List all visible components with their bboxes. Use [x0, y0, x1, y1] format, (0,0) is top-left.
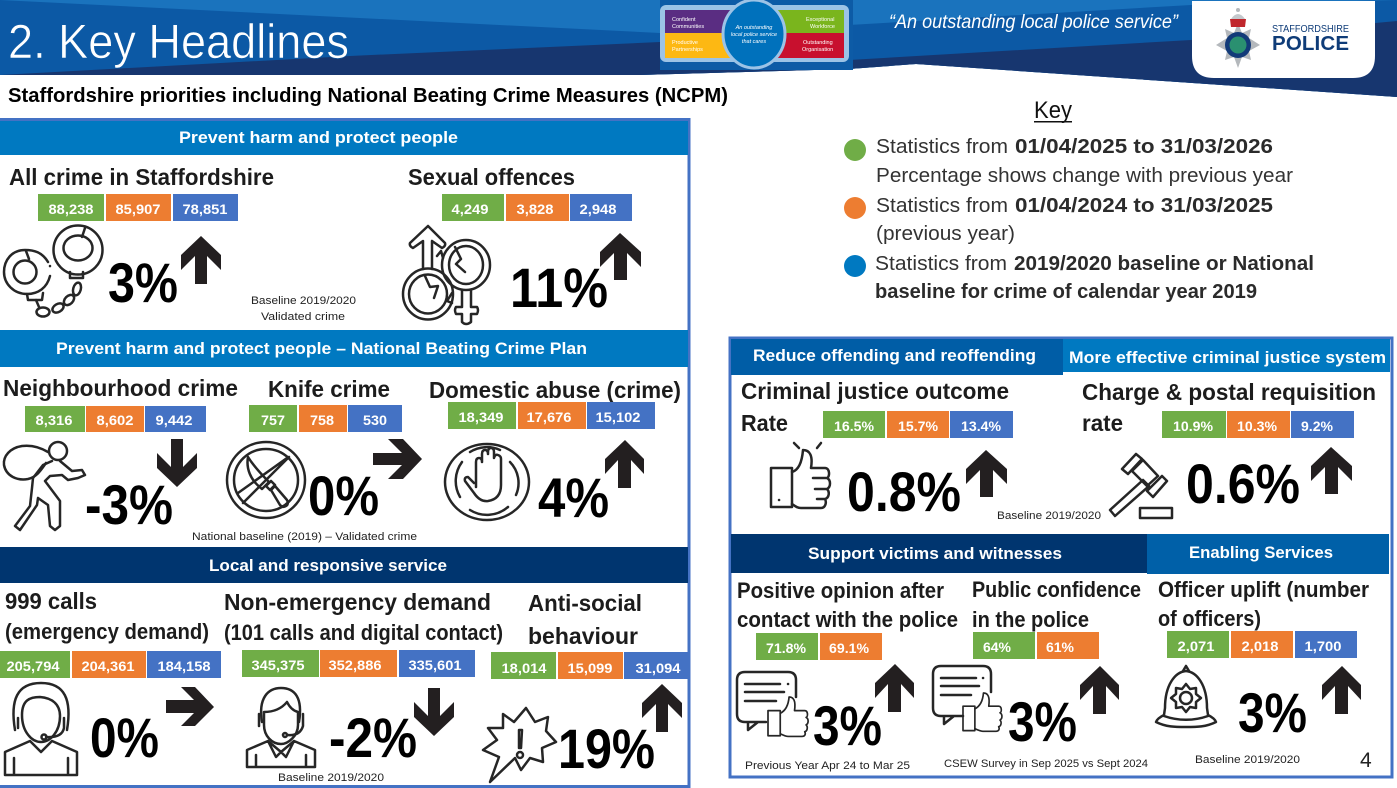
arrow right [373, 439, 422, 479]
key: orange: (previous year) [876, 223, 1015, 245]
metric: anti-social behaviour: 19% [558, 717, 655, 780]
key: blue [844, 253, 1314, 303]
metric: non-emergency demand: 345,375 [252, 657, 305, 673]
icon: feedback bubble with thumb [737, 672, 808, 736]
metric: sexual offences: 3,828 [516, 201, 554, 217]
metric: knife crime: 530 [363, 412, 387, 428]
section heading: support victims [731, 534, 1147, 573]
metric: criminal justice outcome rate: 0.8% [847, 460, 961, 523]
metric: criminal justice outcome rate: 15.7% [898, 418, 939, 434]
metric: 999 calls: 184,158 [158, 658, 211, 674]
arrow up [966, 450, 1007, 497]
icon: police helmet [1156, 666, 1216, 727]
panel: justice, victims and enabling [730, 338, 1392, 777]
header banner [0, 0, 1397, 97]
metric: domestic abuse: 4% [538, 466, 609, 529]
values logo: Workforce [810, 24, 835, 30]
title: 2. Key Headlines [8, 16, 349, 69]
police logo: STAFFORDSHIRE [1272, 23, 1349, 35]
metric: 999 calls: 0% [90, 706, 159, 769]
metric: non-emergency demand: (101 calls and digital contact) [224, 620, 503, 645]
metric: positive opinion: contact with the police [737, 607, 958, 632]
metric: domestic abuse: 17,676 [526, 409, 572, 425]
police logo [1192, 1, 1375, 78]
section heading: local and responsive service: Local and responsive service [209, 557, 447, 575]
metric: anti-social behaviour [483, 590, 689, 782]
metric: neighbourhood crime: Neighbourhood crime [3, 375, 238, 401]
page number: 4 [1360, 749, 1372, 772]
section heading: enabling services: Enabling Services [1189, 544, 1333, 562]
note: Baseline 2019/2020 [997, 510, 1101, 522]
metric: knife crime: 0% [308, 464, 379, 527]
metric: public confidence: 64% [983, 639, 1012, 655]
key: green: Statistics from [876, 136, 1008, 158]
icon: warning burst [483, 708, 556, 782]
icon: no knives [227, 442, 305, 518]
values logo: local police service [731, 32, 777, 38]
metric: positive opinion: Positive opinion after [737, 578, 944, 603]
values logo: An outstanding [735, 25, 773, 31]
arrow up [605, 440, 644, 488]
section heading: national beating crime plan [0, 330, 688, 367]
subtitle: Staffordshire priorities including National Beating Crime Measures (NCPM) [8, 85, 728, 107]
values logo [660, 0, 853, 70]
section heading: reduce offending [731, 339, 1063, 375]
metric: officer uplift: 2,071 [1178, 638, 1215, 654]
note: Baseline 2019/2020 [251, 295, 356, 307]
icon: male call handler [247, 688, 315, 767]
police logo: POLICE [1272, 32, 1349, 55]
metric: neighbourhood crime: 9,442 [156, 412, 193, 428]
arrow up [1311, 447, 1352, 494]
metric: public confidence: 61% [1046, 639, 1075, 655]
metric: sexual offences [403, 164, 641, 324]
key: orange: 01/04/2024 to 31/03/2025 [1015, 195, 1273, 217]
arrow up [1080, 666, 1119, 714]
icon: thief with sack [4, 442, 85, 530]
note: Baseline 2019/2020 [278, 772, 384, 784]
key: blue: 2019/2020 baseline or National [1014, 253, 1314, 275]
values logo: Confident [672, 17, 696, 23]
values logo: Organisation [802, 47, 833, 53]
metric: domestic abuse: Domestic abuse (crime) [429, 377, 681, 403]
metric: all crime: 85,907 [116, 201, 161, 217]
values logo: Productive [672, 40, 698, 46]
metric: charge and postal requisition rate: rate [1082, 410, 1123, 436]
metric: knife crime: 758 [310, 412, 334, 428]
arrow up [600, 233, 641, 280]
metric: 999 calls: 204,361 [82, 658, 135, 674]
panel: Staffordshire priorities [0, 120, 689, 786]
arrow up [875, 664, 914, 712]
metric: knife crime: 757 [261, 412, 285, 428]
arrow down [157, 439, 197, 487]
metric: all crime: 3% [108, 251, 178, 314]
metric: criminal justice outcome rate: 13.4% [961, 418, 1002, 434]
values logo: Outstanding [803, 40, 833, 46]
metric: neighbourhood crime: -3% [85, 473, 173, 536]
key: orange [844, 195, 1273, 245]
metric: sexual offences: 2,948 [580, 201, 617, 217]
metric: all crime [4, 164, 356, 323]
metric: 999 calls: 999 calls [5, 588, 97, 614]
strapline quote: “An outstanding local police service” [889, 12, 1180, 33]
metric: anti-social behaviour: 31,094 [636, 660, 681, 676]
metric: criminal justice outcome rate: Rate [741, 410, 788, 436]
metric: neighbourhood crime: 8,602 [96, 412, 134, 428]
metric: non-emergency demand [224, 589, 503, 784]
metric: non-emergency demand: Non-emergency demand [224, 589, 491, 615]
arrow up [642, 684, 682, 732]
key: green [844, 136, 1293, 187]
section heading: criminal justice system: More effective criminal justice system [1069, 349, 1386, 367]
metric: public confidence: 3% [1008, 690, 1077, 753]
metric: sexual offences: 4,249 [452, 201, 489, 217]
metric: charge and postal requisition rate: Charge & postal requisition [1082, 379, 1376, 405]
metric: anti-social behaviour: 15,099 [568, 660, 613, 676]
key: blue: baseline for crime of calendar year 2019 [875, 281, 1257, 303]
section heading: prevent harm: Prevent harm and protect people [179, 129, 458, 147]
metric: knife crime: Knife crime [268, 376, 390, 402]
metric: non-emergency demand: 335,601 [408, 657, 462, 673]
values logo: Partnerships [672, 47, 703, 53]
metric: officer uplift: of officers) [1158, 606, 1261, 631]
metric: non-emergency demand: -2% [329, 706, 417, 769]
metric: anti-social behaviour: Anti-social [528, 590, 642, 616]
metric: sexual offences: 11% [510, 256, 608, 319]
key: orange: Statistics from [876, 195, 1008, 217]
note: Previous Year Apr 24 to Mar 25 [745, 760, 910, 772]
metric: charge and postal requisition rate: 0.6% [1186, 452, 1300, 515]
key: green: Percentage shows change with previous year [876, 165, 1293, 187]
values logo: Exceptional [806, 17, 834, 23]
icon: gender symbols [403, 226, 490, 324]
metric: officer uplift: 1,700 [1304, 638, 1342, 654]
metric: public confidence [933, 577, 1148, 770]
metric: positive opinion: 71.8% [766, 640, 807, 656]
metric: all crime: 78,851 [182, 201, 228, 217]
icon: gavel [1110, 454, 1172, 518]
metric: neighbourhood crime: 8,316 [36, 412, 73, 428]
section heading: criminal justice system [1063, 339, 1390, 372]
icon: thumbs up [771, 443, 830, 508]
metric: 999 calls: (emergency demand) [5, 619, 209, 644]
key: blue: Statistics from [875, 253, 1007, 275]
icon: handcuffs [4, 226, 102, 316]
metric: positive opinion: 3% [813, 694, 882, 757]
metric: public confidence: in the police [972, 607, 1089, 632]
metric: charge and postal requisition rate: 9.2% [1301, 418, 1334, 434]
metric: 999 calls [0, 588, 221, 775]
metric: officer uplift: Officer uplift (number [1158, 577, 1369, 602]
section heading: local and responsive service [0, 547, 688, 583]
section heading: support victims: Support victims and witnesses [808, 545, 1062, 563]
metric: non-emergency demand: 352,886 [328, 657, 382, 673]
metric: anti-social behaviour: behaviour [528, 623, 638, 649]
section heading: enabling services [1147, 534, 1389, 574]
section heading: prevent harm [0, 121, 688, 155]
metric: all crime: 88,238 [48, 201, 94, 217]
metric: charge and postal requisition rate: 10.9% [1173, 418, 1214, 434]
metric: officer uplift [1156, 577, 1369, 766]
icon: feedback bubble with thumb [933, 666, 1002, 731]
metric: domestic abuse: 15,102 [596, 409, 641, 425]
metric: criminal justice outcome rate: 16.5% [834, 418, 875, 434]
metric: all crime: All crime in Staffordshire [9, 164, 274, 190]
metric: positive opinion: 69.1% [829, 640, 870, 656]
metric: domestic abuse [429, 377, 681, 529]
note: Baseline 2019/2020 [1195, 754, 1300, 766]
metric: officer uplift: 3% [1238, 681, 1307, 744]
note: CSEW Survey in Sep 2025 vs Sept 2024 [944, 758, 1148, 770]
arrow right [166, 687, 214, 726]
icon: female call handler [5, 683, 77, 775]
metric: 999 calls: 205,794 [6, 658, 60, 674]
values logo: that cares [742, 39, 766, 45]
metric: domestic abuse: 18,349 [458, 409, 504, 425]
metric: charge and postal requisition rate [1082, 379, 1376, 518]
metric: knife crime [227, 376, 422, 527]
metric: criminal justice outcome rate [741, 378, 1101, 523]
icon: stop hand [445, 444, 529, 520]
arrow down [414, 688, 454, 736]
key: green: 01/04/2025 to 31/03/2026 [1015, 136, 1273, 158]
key heading: Key [1034, 97, 1072, 124]
metric: officer uplift: 2,018 [1242, 638, 1279, 654]
arrow up [1322, 666, 1361, 714]
metric: anti-social behaviour: 18,014 [502, 660, 547, 676]
metric: public confidence: Public confidence [972, 577, 1141, 602]
section heading: reduce offending: Reduce offending and reoffending [753, 347, 1036, 365]
metric: charge and postal requisition rate: 10.3% [1237, 418, 1278, 434]
arrow up [181, 236, 221, 284]
metric: criminal justice outcome rate: Criminal justice outcome [741, 378, 1009, 404]
metric: sexual offences: Sexual offences [408, 164, 575, 190]
metric: neighbourhood crime [3, 375, 238, 536]
note: National baseline (2019) – Validated crime [192, 531, 417, 543]
values logo: Communities [672, 24, 704, 30]
note: Validated crime [261, 311, 345, 323]
metric: positive opinion [737, 578, 958, 772]
note [251, 295, 356, 323]
panel: key [844, 97, 1314, 303]
section heading: national beating crime plan: Prevent harm and protect people – National Beating Crime Plan [56, 340, 587, 358]
